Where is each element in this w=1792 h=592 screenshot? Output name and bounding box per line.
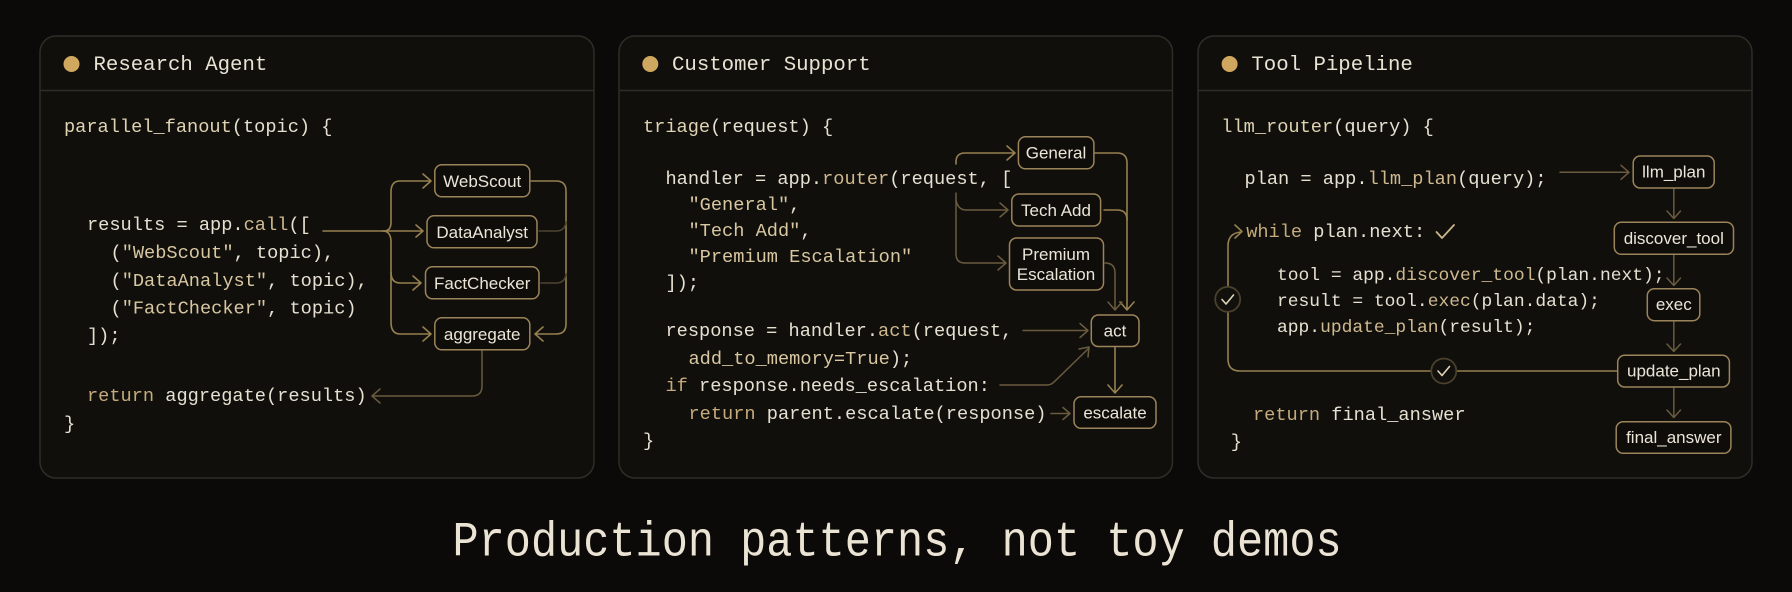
panel heading: Research Agent xyxy=(94,54,267,77)
node: escalate xyxy=(1074,397,1156,428)
code block: triage(request) { xyxy=(643,116,833,138)
code block: tool = app.discover_tool(plan.next); xyxy=(1277,266,1665,286)
panel dot xyxy=(1222,56,1238,72)
node: discover_tool xyxy=(1614,222,1734,254)
panel: Research Agent xyxy=(40,36,594,478)
icon: check after while xyxy=(1436,225,1454,238)
node: WebScout: WebScout xyxy=(443,172,522,191)
code block xyxy=(643,116,1046,452)
fan-out arrows xyxy=(323,174,431,341)
code block: ("FactChecker", topic) xyxy=(110,298,357,320)
code block: results = app.call([ xyxy=(87,214,311,236)
node: WebScout xyxy=(435,165,530,197)
node: act xyxy=(1091,315,1139,346)
panel dot xyxy=(64,56,80,72)
code block: ("WebScout", topic), xyxy=(110,242,334,264)
node: exec xyxy=(1647,289,1700,321)
node: FactChecker: FactChecker xyxy=(434,274,531,293)
node: exec: exec xyxy=(1656,295,1692,314)
arrow: act to escalate xyxy=(1108,347,1122,393)
code block xyxy=(64,116,368,435)
node: DataAnalyst xyxy=(427,216,537,248)
panel: Customer Support xyxy=(619,36,1172,478)
code block: "Premium Escalation" xyxy=(688,246,912,268)
node: General: General xyxy=(1026,144,1086,162)
node: act: act xyxy=(1104,322,1127,340)
icon: loop check 2 xyxy=(1431,358,1456,384)
code block: parallel_fanout(topic) { xyxy=(64,116,332,138)
router arrows xyxy=(956,146,1015,270)
code block: } xyxy=(64,413,75,435)
code block xyxy=(1221,116,1665,453)
node: aggregate: aggregate xyxy=(444,325,520,344)
node: Tech Add: Tech Add xyxy=(1021,201,1091,220)
node: final_answer xyxy=(1616,422,1731,453)
code block: add_to_memory=True); xyxy=(688,348,912,370)
code block: return final_answer xyxy=(1253,404,1466,426)
node: update_plan: update_plan xyxy=(1627,362,1721,380)
code block: llm_router(query) { xyxy=(1221,116,1434,138)
node: General xyxy=(1018,137,1094,169)
pipeline arrows xyxy=(1667,189,1680,418)
code block: app.update_plan(result); xyxy=(1277,318,1535,338)
code block: ]); xyxy=(666,272,699,294)
node: llm_plan xyxy=(1633,156,1714,188)
code block: plan = app.llm_plan(query); xyxy=(1244,168,1547,190)
node: Premium Escalation xyxy=(1010,238,1104,290)
code block: } xyxy=(1231,431,1242,453)
code block: while plan.next: xyxy=(1246,221,1425,243)
panel heading: Customer Support xyxy=(672,54,871,77)
node: final_answer: final_answer xyxy=(1626,428,1722,447)
icon: loop check 1 xyxy=(1215,287,1240,312)
code block: response = handler.act(request, xyxy=(666,320,1012,342)
node: Premium Escalation: Premium xyxy=(1022,245,1090,264)
arrow: response to act xyxy=(1023,324,1088,338)
return arrow xyxy=(372,351,482,403)
code block: result = tool.exec(plan.data); xyxy=(1277,292,1600,312)
node: escalate: escalate xyxy=(1083,404,1147,422)
code block: "General", xyxy=(688,194,800,216)
code block: return aggregate(results) xyxy=(87,385,367,407)
panel dot xyxy=(642,56,658,72)
panel heading: Tool Pipeline xyxy=(1251,54,1413,77)
node: llm_plan: llm_plan xyxy=(1642,162,1705,182)
code block: handler = app.router(request, [ xyxy=(666,168,1012,190)
node: FactChecker xyxy=(426,267,539,299)
title: Production patterns, not toy demos xyxy=(452,514,1342,570)
fan-in arrows xyxy=(531,181,566,341)
code block: } xyxy=(643,430,654,452)
node: Tech Add xyxy=(1012,194,1101,226)
arrow: return to escalate xyxy=(1051,408,1070,420)
code block: return parent.escalate(response) xyxy=(688,403,1046,425)
merge arrows into act xyxy=(1095,153,1134,310)
node: discover_tool: discover_tool xyxy=(1624,229,1724,248)
node: DataAnalyst: DataAnalyst xyxy=(436,223,528,242)
arrow: plan to llm_plan xyxy=(1560,165,1629,179)
node: Premium Escalation: Escalation xyxy=(1017,265,1095,284)
code block: "Tech Add", xyxy=(688,220,812,242)
node: aggregate xyxy=(435,318,530,350)
panel: Tool Pipeline xyxy=(1198,36,1752,478)
code block: if response.needs_escalation: xyxy=(666,375,990,397)
node: update_plan xyxy=(1618,355,1729,387)
arrow: escalation to act xyxy=(1000,347,1089,385)
code block: ]); xyxy=(87,325,121,347)
loop arrow xyxy=(1228,225,1617,371)
code block: ("DataAnalyst", topic), xyxy=(110,270,368,292)
